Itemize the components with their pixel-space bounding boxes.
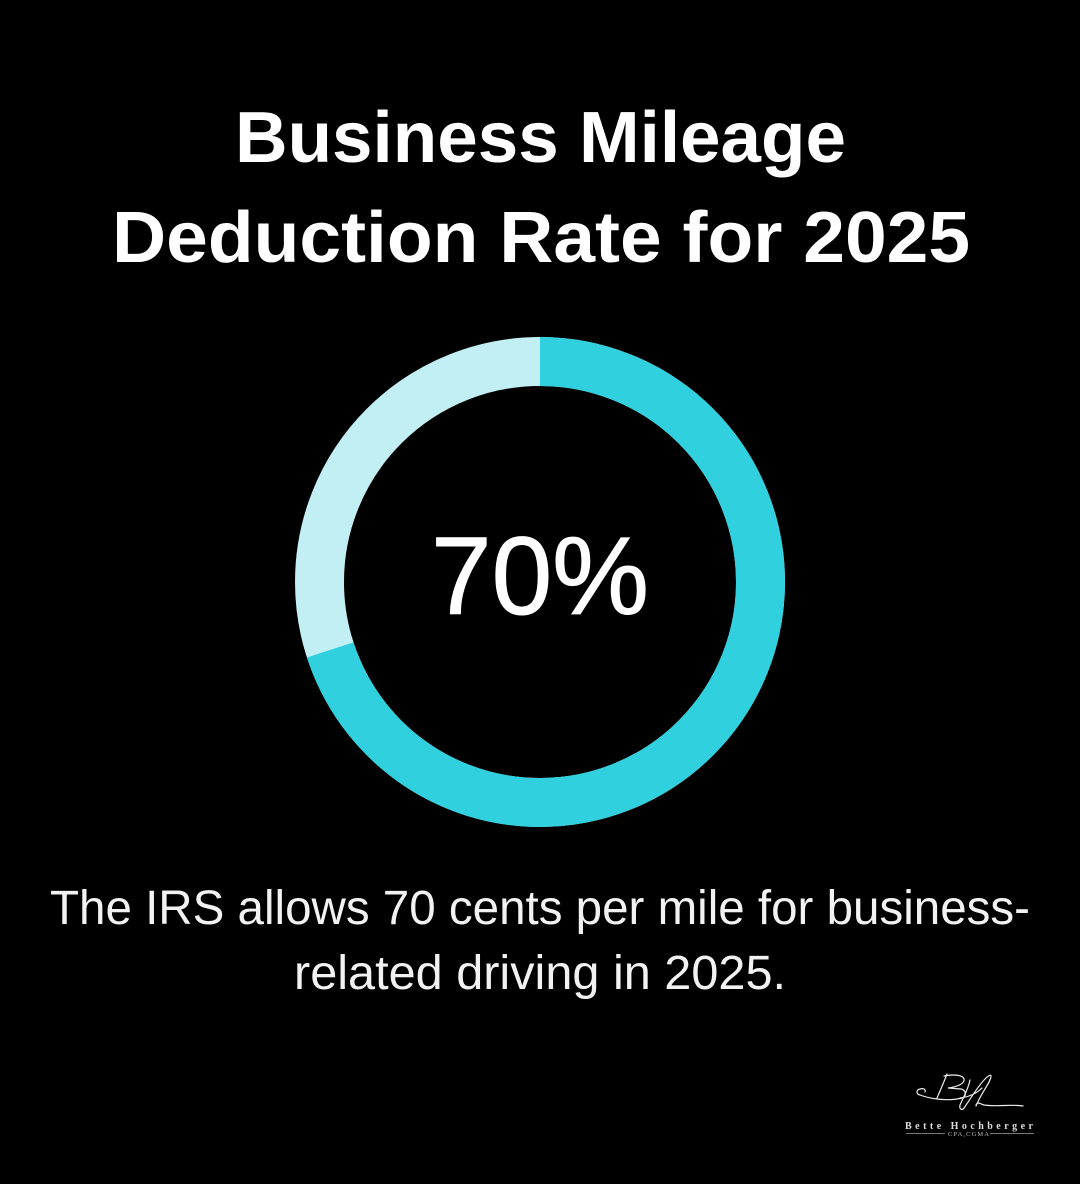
description text: related driving in 2025. [294, 947, 786, 1000]
title: Business Mileage [235, 98, 846, 178]
description text [50, 882, 1030, 1000]
donut value: 70% [431, 515, 649, 638]
donut chart: 70 percent [320, 362, 760, 802]
title: Deduction Rate for 2025 [112, 198, 970, 278]
logo: Bette Hochberger signature [905, 1074, 1034, 1138]
logo: Bette Hochberger signature: Bette Hochberger [905, 1121, 1034, 1132]
description text: The IRS allows 70 cents per mile for business- [50, 882, 1030, 935]
title [112, 98, 970, 278]
logo: Bette Hochberger signature: CPA,CGMA [948, 1131, 989, 1138]
